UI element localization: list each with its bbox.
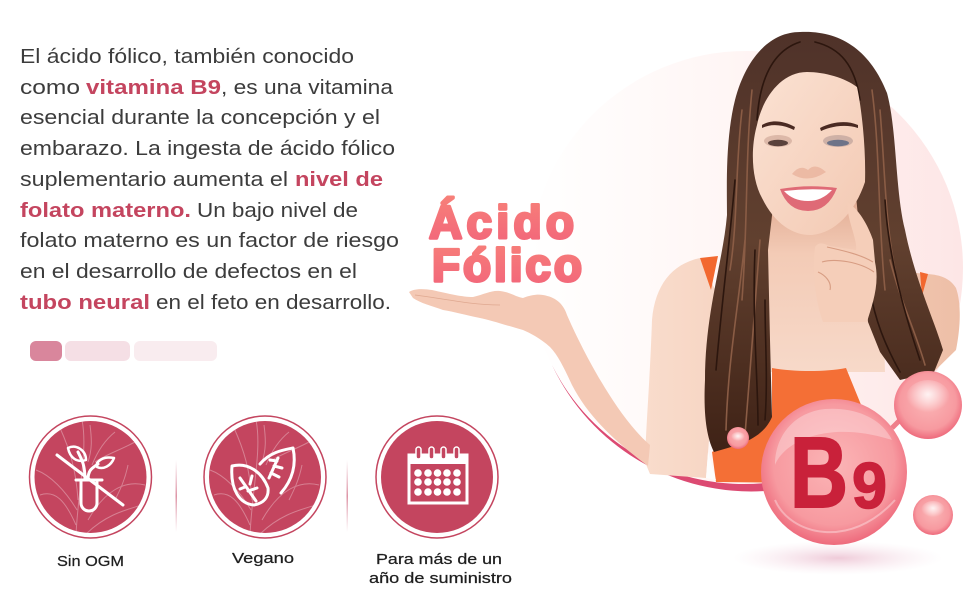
text block: intro paragraph: folato materno es un factor de riesgo (20, 229, 399, 252)
label: supply duration: Para más de un (376, 551, 502, 568)
icon: calendar badge (376, 416, 498, 538)
divider (176, 460, 177, 532)
text block: intro paragraph: , es una vitamina (221, 76, 394, 99)
arc: dark pink crescent under the circle (552, 365, 765, 491)
heading: Ácido Fólico (429, 196, 582, 291)
text block: intro paragraph: El ácido fólico, también conocido (20, 45, 354, 68)
text block: intro paragraph: en el feto en desarrollo. (156, 291, 391, 314)
text block: intro paragraph: suplementario aumenta el (20, 168, 288, 191)
heading: Ácido Fólico: Fólico (432, 239, 582, 291)
pagination pills (30, 341, 217, 361)
text block: intro paragraph: vitamina B9 (86, 76, 221, 99)
text block: intro paragraph: Un bajo nivel de (197, 199, 358, 222)
icon: Sin OGM badge (30, 416, 152, 538)
illustration: woman (409, 32, 960, 483)
heading: Ácido Fólico: Ácido (429, 196, 574, 248)
text block: intro paragraph: esencial durante la concepción y el (20, 106, 380, 129)
icon: B9 vitamin spheres: B (790, 417, 848, 529)
icon: B9 vitamin spheres: 9 (852, 449, 887, 522)
text block: intro paragraph: como (20, 76, 80, 99)
label: supply duration (369, 551, 512, 587)
text block: intro paragraph (20, 45, 399, 314)
text block: intro paragraph: tubo neural (20, 291, 150, 314)
divider (346, 460, 348, 532)
shadow under B9 sphere (733, 541, 943, 575)
label: supply duration: año de suministro (369, 570, 512, 587)
text block: intro paragraph: en el desarrollo de defectos en el (20, 260, 357, 283)
label: Vegano: Vegano (232, 550, 294, 567)
text block: intro paragraph: nivel de (295, 168, 383, 191)
text block: intro paragraph: folato materno. (20, 199, 191, 222)
text block: intro paragraph: embarazo. La ingesta de ácido fólico (20, 137, 395, 160)
panel: pale pink background circle (529, 51, 963, 485)
icon: Vegano badge (204, 416, 326, 538)
icon: B9 vitamin spheres (727, 371, 962, 545)
label: Sin OGM: Sin OGM (57, 553, 124, 570)
